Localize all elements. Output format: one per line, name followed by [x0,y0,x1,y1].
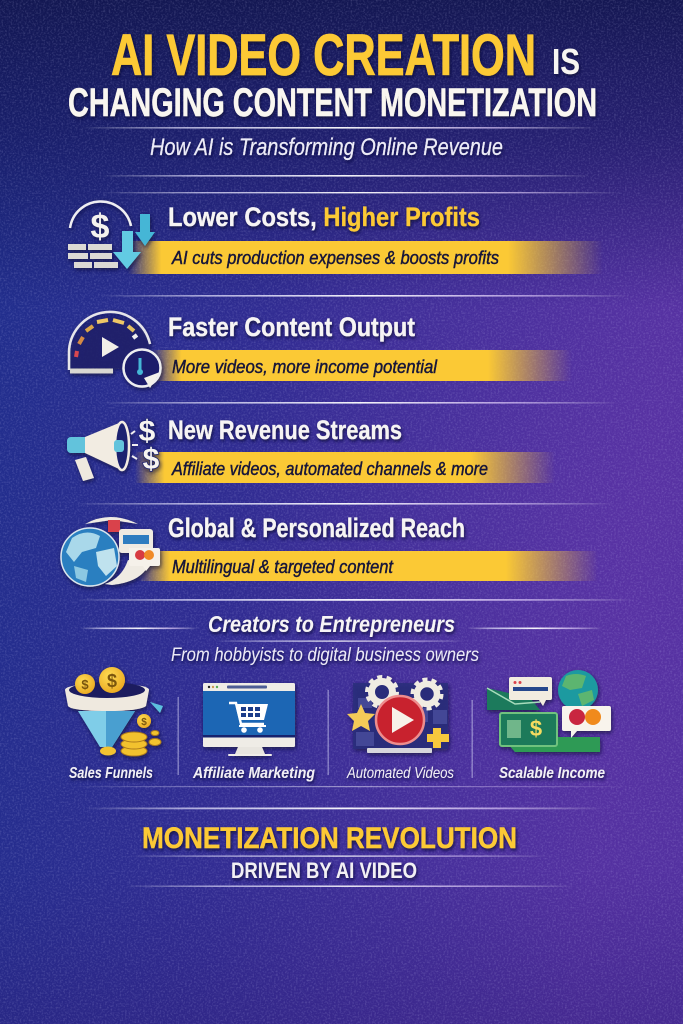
icon: globe with chat cards [61,517,160,586]
item: scalable income [487,670,611,782]
footer subheading: DRIVEN BY AI VIDEO [231,858,417,883]
icon: funnel with coins: $ [141,717,147,728]
yellow band 3 [135,452,555,483]
title: IS [552,41,580,82]
item: sales funnels [65,667,163,782]
band text 3: Affiliate videos, automated channels & more [171,459,488,479]
heading 1: Lower Costs, Higher Profits [168,202,480,232]
icon: money, chat and globe: $ [530,716,542,741]
band text 4: Multilingual & targeted content [172,557,394,577]
icon: monitor with cart [203,683,295,756]
footer heading: MONETIZATION REVOLUTION [142,822,517,855]
title: AI VIDEO CREATION [111,23,536,88]
icon: funnel with coins: $ [81,677,89,692]
icon: funnel with coins: $ [107,671,117,691]
panel: global and personalized reach [61,513,598,586]
icon: dollar, bricks and down arrows: $ [91,208,110,246]
title [68,23,597,125]
label: Scalable Income [499,765,605,782]
label: Affiliate Marketing [192,765,315,782]
icon: play button with gears [347,677,449,753]
item: automated videos [346,677,454,782]
yellow band 4 [138,551,598,581]
label: Automated Videos [346,765,454,782]
heading 2: Faster Content Output [168,312,415,342]
panel: lower costs [68,201,603,274]
icon: dollar, bricks and down arrows [68,201,155,269]
icon: megaphone with dollars: $ [143,443,160,476]
band text 2: More videos, more income potential [172,357,438,377]
icon: funnel with coins [65,667,163,756]
section subtitle: From hobbyists to digital business owners [171,645,479,666]
panel: new revenue streams [67,415,555,483]
icon: megaphone with dollars: $ [139,415,156,448]
label: Sales Funnels [69,765,153,782]
panel: faster content output [69,312,572,388]
heading 3: New Revenue Streams [168,415,402,445]
section heading: creators to entrepreneurs: Creators to Entrepreneurs [208,611,455,637]
yellow band 1 [128,241,603,274]
yellow band 2 [152,350,572,381]
icon: megaphone with dollars [67,415,160,481]
item: affiliate marketing [192,683,315,782]
heading 4: Global & Personalized Reach [168,513,465,543]
icon: speedometer with clock [69,312,160,388]
subtitle: How AI is Transforming Online Revenue [150,134,503,161]
band text 1: AI cuts production expenses & boosts profits [171,248,499,268]
